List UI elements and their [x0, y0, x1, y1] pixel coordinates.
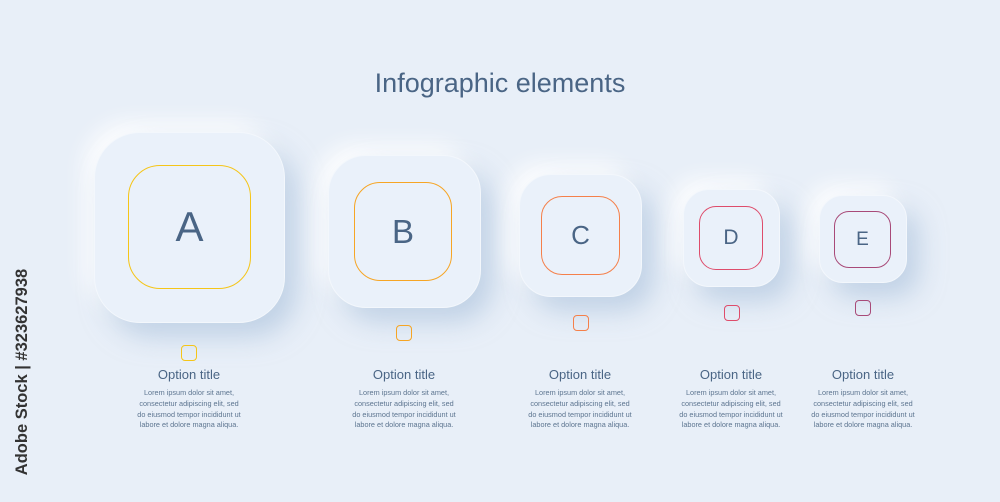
- text A: [137, 367, 241, 429]
- text D: do eiusmod tempor incididunt ut: [679, 410, 783, 419]
- letter box B: B: [392, 212, 414, 250]
- text B: [352, 367, 456, 429]
- text E: labore et dolore magna aliqua.: [814, 420, 912, 429]
- text D: Option title: [700, 367, 762, 382]
- card B: [328, 155, 481, 308]
- marker D: [724, 305, 740, 321]
- letter box A: A: [175, 203, 204, 250]
- text B: labore et dolore magna aliqua.: [355, 420, 453, 429]
- marker C: [573, 315, 589, 331]
- card C: [519, 174, 642, 297]
- text B: Lorem ipsum dolor sit amet,: [359, 388, 449, 397]
- letter box C: C: [571, 220, 590, 250]
- letter box A: [128, 165, 251, 289]
- card D: [683, 189, 780, 287]
- text A: labore et dolore magna aliqua.: [140, 420, 238, 429]
- card E: [819, 195, 907, 283]
- card A: [94, 132, 285, 323]
- marker A: [181, 345, 197, 361]
- panel: B: [314, 142, 504, 333]
- letter box D: [699, 206, 763, 270]
- text E: do eiusmod tempor incididunt ut: [811, 410, 915, 419]
- letter box D: D: [723, 226, 739, 249]
- text B: Option title: [373, 367, 435, 382]
- marker B: [396, 325, 412, 341]
- text D: Lorem ipsum dolor sit amet,: [686, 388, 776, 397]
- text E: Lorem ipsum dolor sit amet,: [818, 388, 908, 397]
- panel: E: [804, 182, 930, 308]
- text C: [528, 367, 632, 429]
- text E: Option title: [832, 367, 894, 382]
- text E: consectetur adipiscing elit, sed: [813, 399, 913, 408]
- letter box E: [834, 211, 891, 268]
- text C: Lorem ipsum dolor sit amet,: [535, 388, 625, 397]
- text D: consectetur adipiscing elit, sed: [681, 399, 781, 408]
- text D: labore et dolore magna aliqua.: [682, 420, 780, 429]
- text A: Lorem ipsum dolor sit amet,: [144, 388, 234, 397]
- letter box E: E: [856, 228, 869, 250]
- text C: do eiusmod tempor incididunt ut: [528, 410, 632, 419]
- text D: [679, 367, 783, 429]
- text A: do eiusmod tempor incididunt ut: [137, 410, 241, 419]
- text C: consectetur adipiscing elit, sed: [530, 399, 630, 408]
- marker E: [855, 300, 871, 316]
- panel: A: [82, 120, 308, 348]
- title: Infographic elements: [375, 68, 625, 98]
- text A: Option title: [158, 367, 220, 382]
- text E: [811, 367, 915, 429]
- letter box C: [541, 196, 620, 275]
- panel: C: [503, 162, 664, 322]
- text C: Option title: [549, 367, 611, 382]
- letter box B: [354, 182, 452, 281]
- text C: labore et dolore magna aliqua.: [531, 420, 629, 429]
- panel: D: [668, 176, 802, 312]
- text B: do eiusmod tempor incididunt ut: [352, 410, 456, 419]
- watermark: Adobe Stock id: Adobe Stock | #323627938: [13, 269, 31, 475]
- text A: consectetur adipiscing elit, sed: [139, 399, 239, 408]
- text B: consectetur adipiscing elit, sed: [354, 399, 454, 408]
